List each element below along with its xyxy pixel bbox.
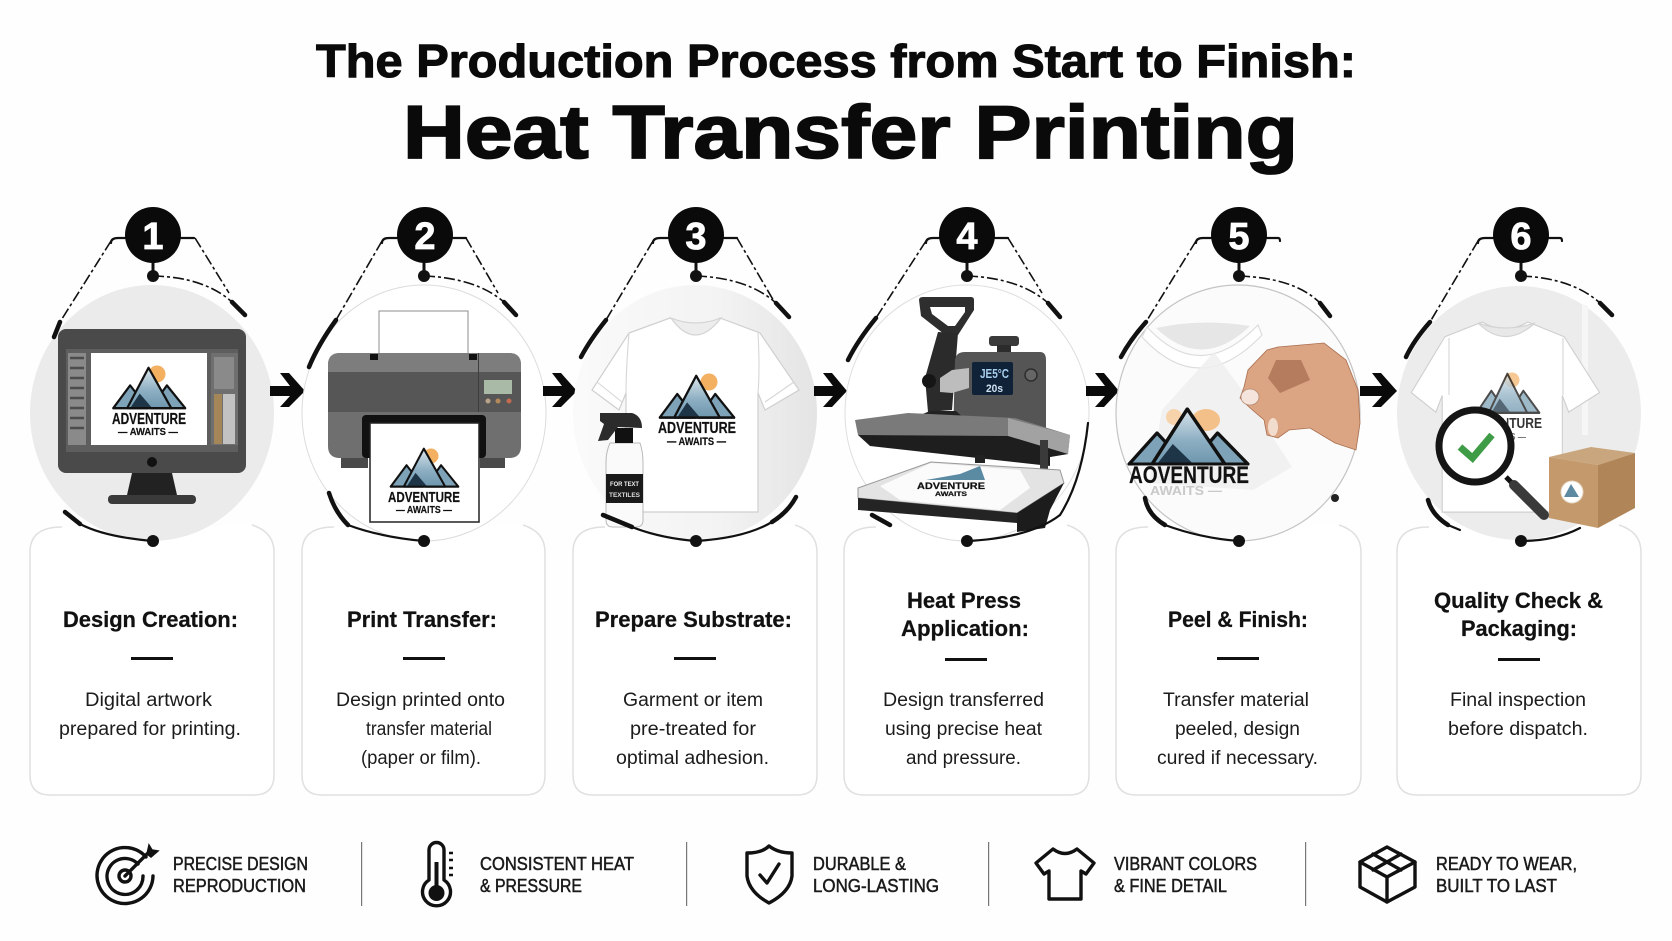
text card 2 (302, 525, 545, 795)
illustration: monitor: ADVENTURE (112, 411, 186, 428)
panel: step 6 quality check and packaging (1397, 207, 1641, 795)
text card 4: Heat Press (907, 588, 1021, 613)
text card 4: Design transferred (883, 690, 1044, 711)
title: Heat Transfer Printing (403, 90, 1298, 174)
text card 2: (paper or film). (361, 748, 481, 769)
icon: magnifying glass with check (1439, 410, 1544, 515)
step number 3: 3 (685, 216, 707, 258)
illustration: inspection and box: ADVENTURE (1467, 415, 1542, 432)
text card 4: Application: (901, 616, 1029, 641)
icon: spray bottle (598, 413, 643, 527)
icon: hand (1240, 343, 1360, 450)
benefit: vibrant colors and fine detail: VIBRANT COLORS (1114, 854, 1257, 874)
illustration: printer: ADVENTURE (388, 489, 460, 506)
step number 2: 2 (414, 216, 436, 258)
panel: step 2 print transfer (302, 207, 546, 795)
benefit: ready to wear, built to last (1360, 847, 1577, 902)
text card 5 (1116, 525, 1361, 795)
illustration: t-shirt and spray bottle: ADVENTURE (658, 420, 736, 437)
illustration: peeling film: AOVENTURE (1129, 462, 1249, 489)
illustration: heat press (845, 285, 1089, 541)
illustration: t-shirt and spray bottle (573, 285, 817, 541)
step number 1: 1 (142, 216, 164, 258)
step number 2 (397, 207, 453, 263)
text card 2: Design printed onto (336, 690, 505, 711)
benefit: durable and long-lasting: DURABLE & (813, 854, 906, 874)
icon: spray bottle: FOR TEXT (610, 481, 639, 488)
illustration: heat press: AWAITS (935, 492, 967, 498)
illustration: printer: — AWAITS — (396, 504, 452, 516)
text card 2: Print Transfer: (347, 607, 497, 632)
text card 4: using precise heat (885, 719, 1043, 740)
text card 6: Final inspection (1450, 690, 1586, 711)
text card 4: and pressure. (906, 748, 1021, 769)
icon: thermometer (423, 842, 453, 906)
icon: spray bottle: TEXTILES (609, 492, 641, 499)
text card 5: Peel & Finish: (1168, 607, 1308, 632)
text card 5: peeled, design (1175, 719, 1300, 740)
text card 1: prepared for printing. (59, 719, 241, 740)
icon: t-shirt (1036, 849, 1094, 899)
text card 1: Digital artwork (85, 690, 213, 711)
text card 1: Design Creation: (63, 607, 238, 632)
text card 6 (1397, 525, 1641, 795)
text card 3: Prepare Substrate: (595, 607, 792, 632)
connector lines (1121, 238, 1339, 547)
benefit: durable and long-lasting (747, 846, 939, 903)
text card 1 (30, 525, 274, 795)
icon: package (1360, 847, 1415, 902)
illustration: heat press: ADVENTURE (917, 481, 985, 491)
panel: step 5 peel and finish (1116, 207, 1361, 795)
step number 6: 6 (1510, 216, 1532, 258)
arrow 5 (1360, 373, 1397, 407)
icon: cardboard box (1549, 447, 1635, 528)
text card 3: pre-treated for (630, 719, 757, 740)
arrow 4 (1086, 373, 1119, 407)
text card 6: Quality Check & (1434, 588, 1603, 613)
connector lines (54, 238, 245, 547)
text card 4 (844, 525, 1089, 795)
arrow 1 (270, 373, 305, 407)
benefit: consistent heat and pressure (423, 842, 634, 906)
text card 5: cured if necessary. (1157, 748, 1318, 769)
benefit: ready to wear, built to last: READY TO WEAR, (1436, 854, 1577, 874)
connector lines (1406, 238, 1612, 547)
step number 5 (1211, 207, 1267, 263)
text card 5: Transfer material (1163, 690, 1309, 711)
connector lines (581, 238, 796, 547)
connector lines (309, 238, 516, 547)
illustration: monitor (30, 285, 274, 541)
title: The Production Process from Start to Finish: (316, 35, 1356, 87)
step number 4 (939, 207, 995, 263)
icon: target (97, 845, 158, 904)
illustration: peeling film: AWAITS — (1150, 483, 1222, 498)
benefit: vibrant colors and fine detail (1036, 849, 1257, 899)
connector lines (848, 238, 1088, 547)
panel: step 3 prepare substrate (573, 207, 817, 795)
arrow 3 (814, 373, 847, 407)
illustration: t-shirt and spray bottle: — AWAITS — (667, 436, 726, 448)
text card 3: Garment or item (623, 690, 763, 711)
text card 3 (573, 525, 817, 795)
step number 1 (125, 207, 181, 263)
illustration: monitor: — AWAITS — (118, 426, 178, 438)
benefit: consistent heat and pressure: & PRESSURE (480, 876, 582, 896)
panel: step 1 design creation (30, 207, 274, 795)
benefit: durable and long-lasting: LONG-LASTING (813, 876, 939, 896)
illustration: inspection and box: AWAITS — (1484, 432, 1526, 443)
benefit: precise design reproduction: REPRODUCTION (173, 876, 306, 896)
panel: step 4 heat press application (844, 207, 1089, 795)
step number 5: 5 (1228, 216, 1250, 258)
illustration: printer (302, 285, 546, 541)
step number 6 (1493, 207, 1549, 263)
benefits row (97, 842, 1577, 906)
benefit: consistent heat and pressure: CONSISTENT HEAT (480, 854, 634, 874)
icon: shield (747, 846, 792, 903)
step number 3 (668, 207, 724, 263)
text card 6: before dispatch. (1448, 719, 1588, 740)
benefit: vibrant colors and fine detail: & FINE DETAIL (1114, 876, 1227, 896)
step number 4: 4 (956, 216, 978, 258)
text card 2: transfer material (366, 719, 492, 740)
benefit: ready to wear, built to last: BUILT TO LAST (1436, 876, 1557, 896)
arrow 2 (543, 373, 577, 407)
benefit: precise design reproduction (97, 845, 308, 904)
title (316, 35, 1356, 174)
benefit: precise design reproduction: PRECISE DESIGN (173, 854, 308, 874)
illustration: heat press: 20s (986, 383, 1003, 395)
illustration: inspection and box (1397, 286, 1641, 540)
illustration: heat press: JE5°C (980, 367, 1009, 381)
text card 6: Packaging: (1461, 616, 1577, 641)
illustration: peeling film (1116, 285, 1360, 541)
text card 3: optimal adhesion. (616, 748, 769, 769)
